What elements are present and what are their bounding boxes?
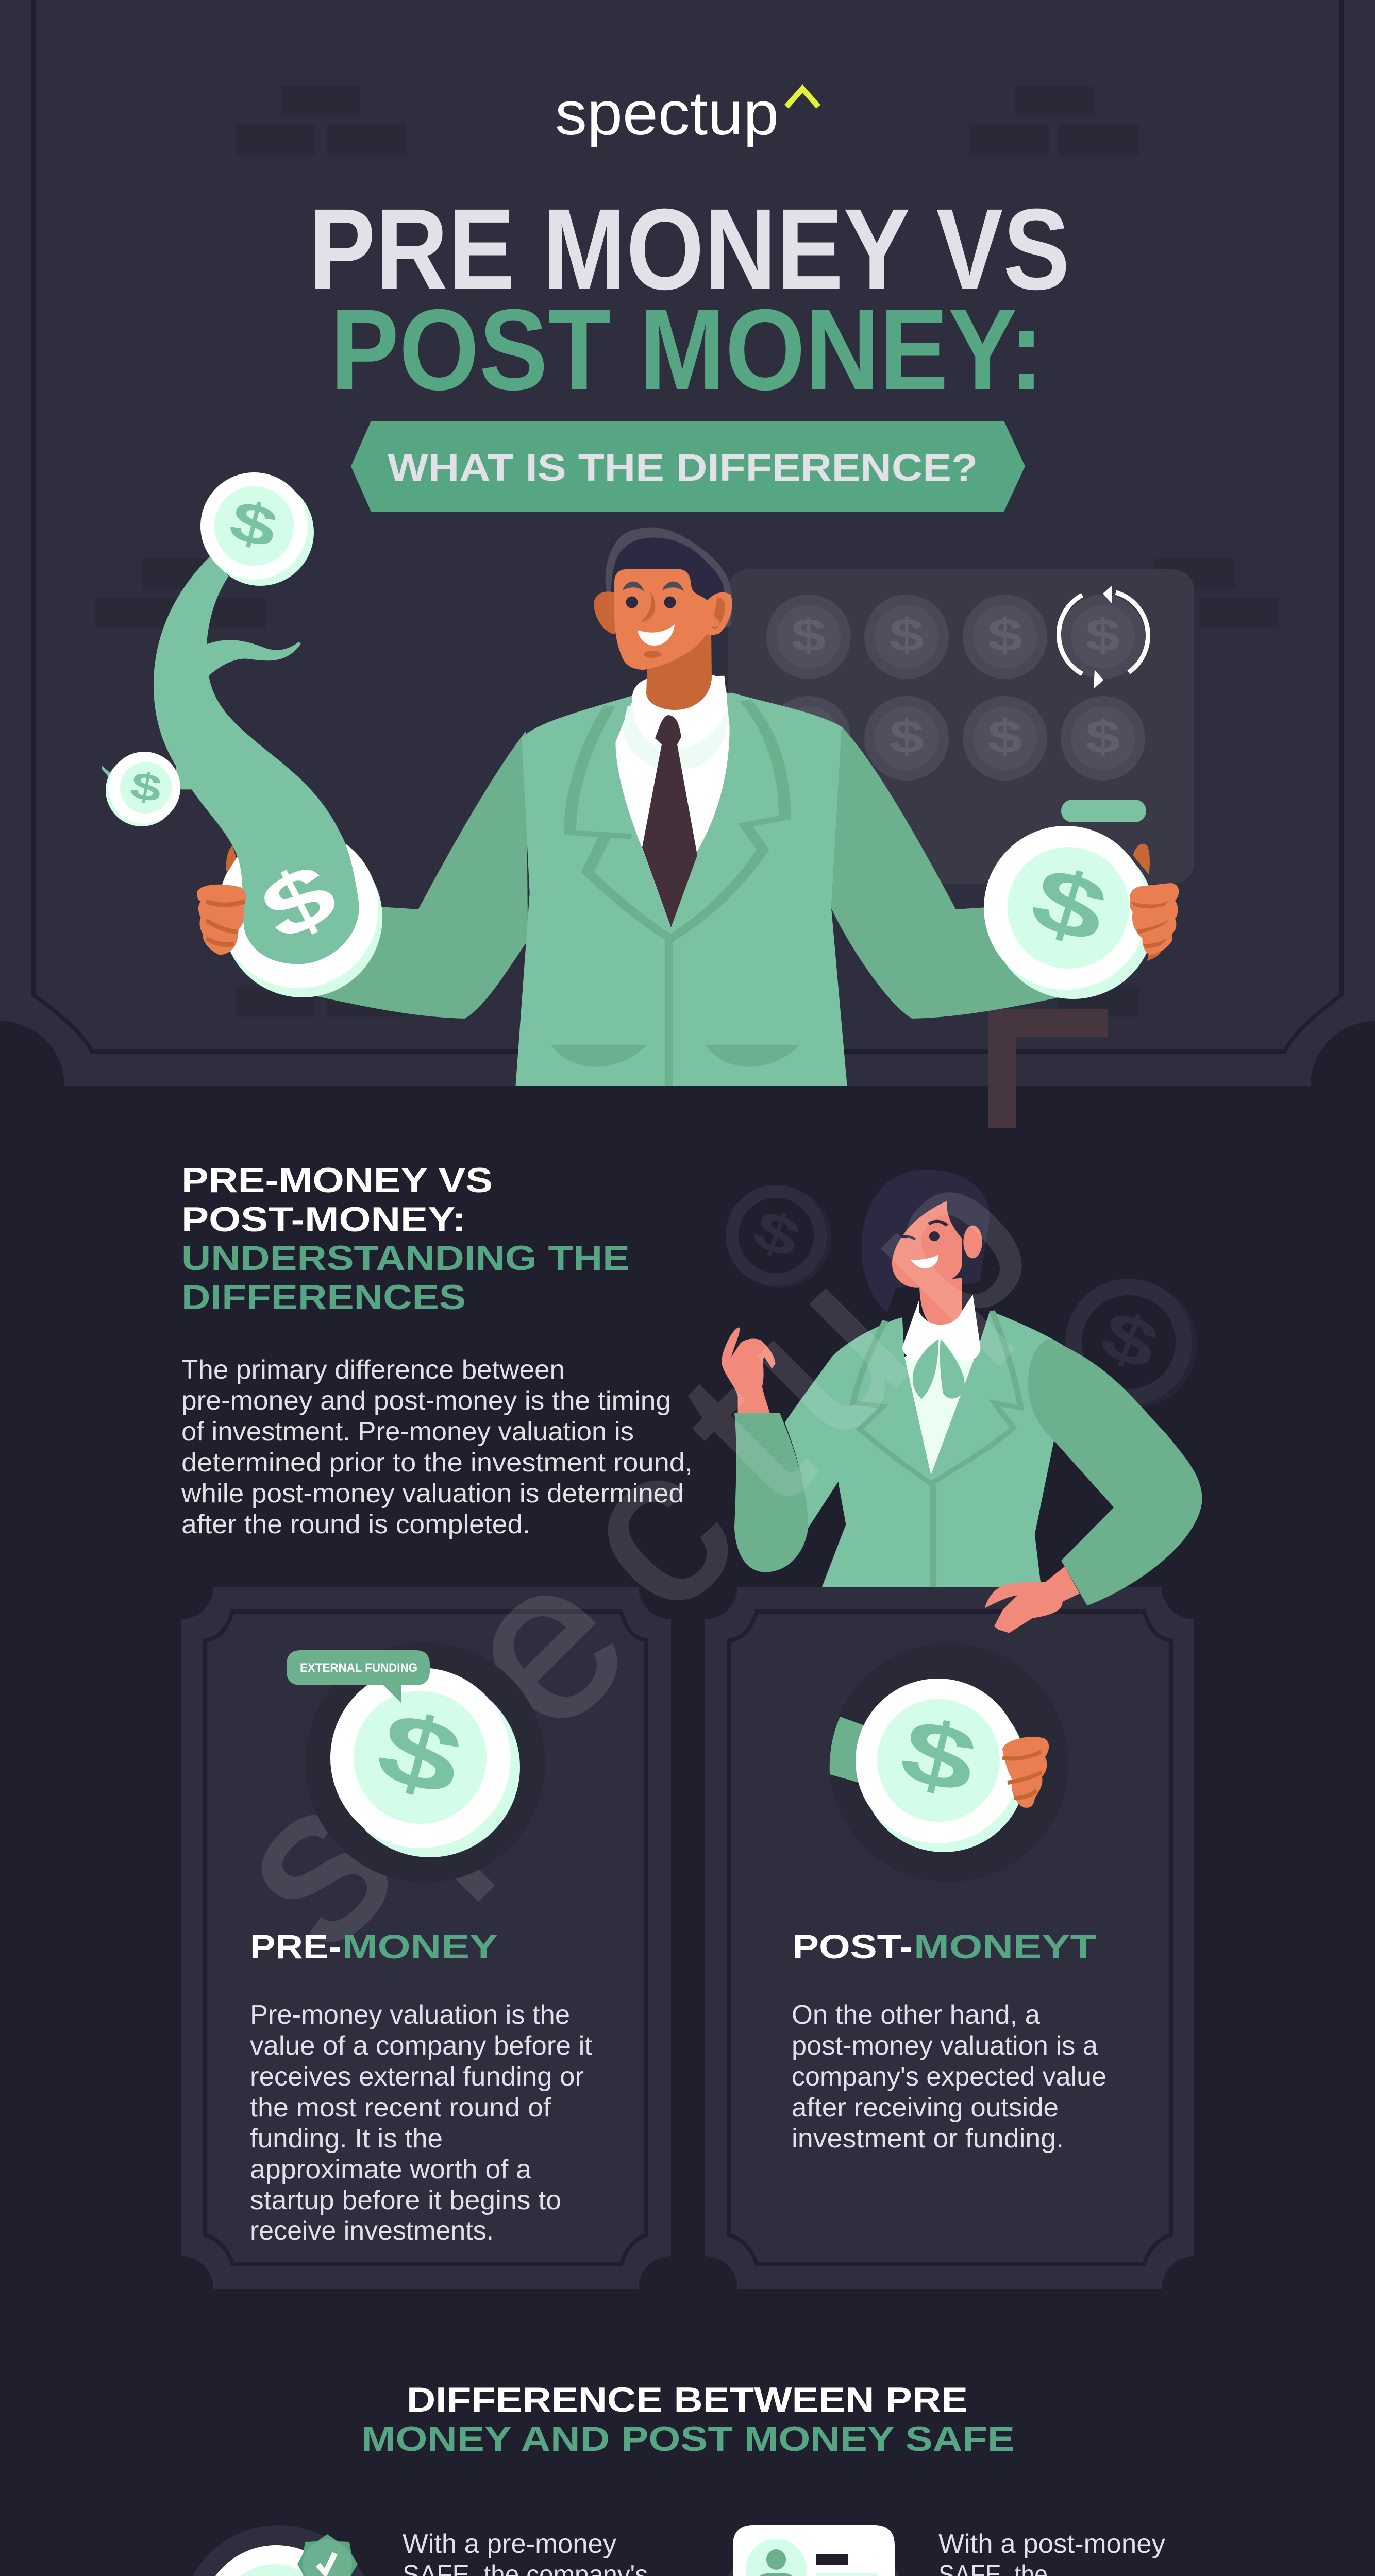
face [614, 569, 709, 670]
hair halo [606, 528, 732, 631]
chin shade [644, 651, 661, 658]
text: pre-money description: value of a company before it [250, 2031, 593, 2061]
panel: coin vending board behind man: $ [889, 710, 924, 762]
panel: coin vending board behind man: $ [987, 609, 1022, 661]
intro paragraph: The primary difference between [181, 1355, 565, 1385]
top floating coin: $ [224, 488, 283, 561]
text: post-money description: post-money valuation is a [792, 2031, 1098, 2061]
eye left [626, 597, 638, 608]
text: pre-money description: receive investments. [250, 2216, 494, 2246]
intro paragraph [181, 1355, 693, 1539]
panel: coin vending board behind man: $ [791, 710, 826, 762]
heading: pre-money: PRE- [250, 1927, 341, 1965]
intro paragraph: of investment. Pre-money valuation is [181, 1417, 634, 1447]
money tentacle [102, 556, 359, 964]
left sleeve [298, 731, 528, 1019]
wink [896, 1236, 915, 1239]
right coin [984, 826, 1155, 999]
finger folds [206, 902, 245, 945]
shirt tint band [624, 706, 727, 768]
thumb [226, 845, 237, 873]
hair [611, 538, 725, 608]
section heading: understanding the differences: UNDERSTANDING THE [181, 1239, 630, 1278]
text: post-money description: On the other hand, a [792, 2000, 1040, 2030]
heading: pre-money: MONEY [342, 1927, 498, 1965]
tie knot [655, 715, 681, 744]
panel: coin vending board behind man: $ [791, 609, 826, 661]
hand [197, 885, 246, 955]
giant spectup watermark: p [814, 1113, 1077, 1376]
icon: post-money coin with hand [829, 1643, 1068, 1882]
section heading: understanding the differences: PRE-MONEY VS [181, 1161, 493, 1200]
character: woman in green suit [722, 1170, 1202, 1633]
section heading: understanding the differences: DIFFERENCES [181, 1278, 466, 1317]
hair back [862, 1170, 990, 1313]
text: post-money description: investment or funding. [792, 2124, 1064, 2154]
giant spectup watermark: t [633, 1328, 852, 1547]
panel: hero header background [0, 0, 1375, 1150]
subtitle banner [351, 421, 1025, 512]
giant spectup watermark: s [185, 1738, 438, 1991]
section heading: difference between SAFEs [361, 2380, 1015, 2459]
callout: external funding bubble: EXTERNAL FUNDING [300, 1661, 417, 1675]
right pocket [706, 1045, 800, 1067]
decorative coin behind woman: left: $ [746, 1198, 808, 1270]
bow [913, 1339, 965, 1399]
text: pre-money description: receives external funding or [250, 2062, 584, 2092]
icon: post-money SAFE card with coin [716, 2525, 911, 2576]
text: post-money description: company's expected value [792, 2062, 1106, 2092]
section heading: difference between SAFEs: DIFFERENCE BETWEEN PRE [407, 2380, 968, 2419]
mouth [911, 1255, 938, 1268]
text: post-money description [792, 2000, 1106, 2154]
left pocket [551, 1045, 647, 1067]
small floating coin: $ [127, 764, 165, 811]
text: pre-money description: Pre-money valuation is the [250, 2000, 570, 2030]
collar [632, 675, 727, 748]
lapels [853, 1311, 1020, 1483]
icon: pre-money SAFE coin with badge [181, 2525, 376, 2576]
centre seam [665, 938, 673, 1086]
eye [929, 1231, 940, 1241]
tie [642, 744, 697, 927]
hair front [947, 1198, 988, 1239]
lapels [570, 700, 785, 938]
section heading: difference between SAFEs: MONEY AND POST MONEY SAFE [361, 2419, 1015, 2459]
character: man in green suit [102, 472, 1179, 1086]
section heading: understanding the differences [181, 1161, 630, 1317]
left big coin [219, 828, 382, 997]
section heading: understanding the differences: POST-MONEY: [181, 1200, 466, 1239]
giant spectup watermark: p [294, 1649, 557, 1911]
eyebrow [929, 1222, 947, 1226]
text: post-money description: after receiving outside [792, 2093, 1059, 2123]
intro paragraph: determined prior to the investment round, [181, 1448, 693, 1478]
watermark bar [988, 1009, 1108, 1128]
title [309, 185, 1070, 414]
giant spectup watermark: e [410, 1513, 673, 1775]
text: pre-money description [250, 2000, 593, 2246]
shirt [615, 676, 730, 927]
mouth [638, 624, 675, 646]
panel: pre-money card [181, 1587, 671, 2289]
seam [930, 1483, 936, 1587]
panel: coin vending board behind man: $ [987, 710, 1022, 762]
money tentacle: $ [246, 843, 350, 959]
text: post-money SAFE [938, 2529, 1165, 2576]
right arm [1028, 1339, 1202, 1606]
text: pre-money SAFE [403, 2529, 648, 2576]
raised hand [722, 1327, 776, 1413]
left arm [734, 1413, 808, 1572]
heading: post-moneyt: MONEYT [914, 1927, 1096, 1965]
intro paragraph: after the round is completed. [181, 1510, 530, 1539]
decorative coin behind woman: left [726, 1185, 831, 1288]
text: pre-money SAFE: With a pre-money [403, 2529, 616, 2559]
text: pre-money description: funding. It is the [250, 2124, 443, 2154]
decorative bricks [95, 86, 1279, 1017]
neck [646, 631, 712, 710]
title: POST MONEY: [330, 285, 1044, 414]
panel: coin vending board behind man: $ [1085, 710, 1120, 762]
decorative coin behind woman: right [1065, 1279, 1197, 1408]
neck [919, 1278, 962, 1329]
shirt [904, 1337, 975, 1475]
text: pre-money description: the most recent round of [250, 2093, 551, 2123]
icon: pre-money coin [305, 1642, 545, 1883]
text: post-money SAFE: With a post-money [938, 2529, 1165, 2559]
nose [641, 591, 655, 622]
heading: pre-money [250, 1927, 498, 1965]
text: pre-money description: approximate worth of a [250, 2155, 531, 2184]
logo: spectup: spectup [555, 79, 779, 148]
right hand [1130, 883, 1179, 961]
panel: post-money card [705, 1587, 1194, 2289]
inner ear [711, 598, 725, 629]
left ear [594, 591, 615, 634]
heading: post-moneyt [792, 1927, 1096, 1965]
face [892, 1201, 962, 1288]
right coin: $ [1020, 847, 1118, 962]
icon: refresh arrows [1059, 585, 1148, 689]
collar [902, 1295, 980, 1361]
intro paragraph: pre-money and post-money is the timing [181, 1386, 671, 1416]
icon: pre-money coin: $ [366, 1689, 473, 1818]
ear [963, 1226, 982, 1258]
panel: coin vending board behind man: $ [1085, 609, 1120, 661]
text: pre-money description: startup before it begins to [250, 2185, 561, 2215]
intro paragraph: while post-money valuation is determined [181, 1479, 684, 1509]
jacket torso [515, 693, 847, 1086]
icon: post-money coin with hand: $ [892, 1699, 985, 1813]
panel: coin vending board behind man: $ [889, 609, 924, 661]
eyebrows [623, 582, 684, 591]
decorative coin behind woman: right: $ [1091, 1296, 1168, 1384]
subtitle banner: WHAT IS THE DIFFERENCE? [388, 446, 978, 489]
lower hand [985, 1567, 1080, 1633]
right sleeve [831, 727, 1061, 1019]
panel: coin vending board behind man [728, 569, 1194, 884]
top floating coin [200, 472, 314, 586]
callout: external funding bubble [287, 1650, 430, 1703]
right ear [702, 592, 732, 635]
eye right [664, 597, 676, 608]
title: PRE MONEY VS [309, 185, 1070, 314]
heading: post-moneyt: POST- [792, 1927, 913, 1965]
giant spectup watermark [185, 1113, 1077, 1991]
right hand thumb [1133, 844, 1150, 874]
giant spectup watermark: c [526, 1404, 779, 1657]
small floating coin [106, 752, 180, 826]
jacket torso [785, 1311, 1066, 1587]
giant spectup watermark: u [691, 1221, 953, 1483]
